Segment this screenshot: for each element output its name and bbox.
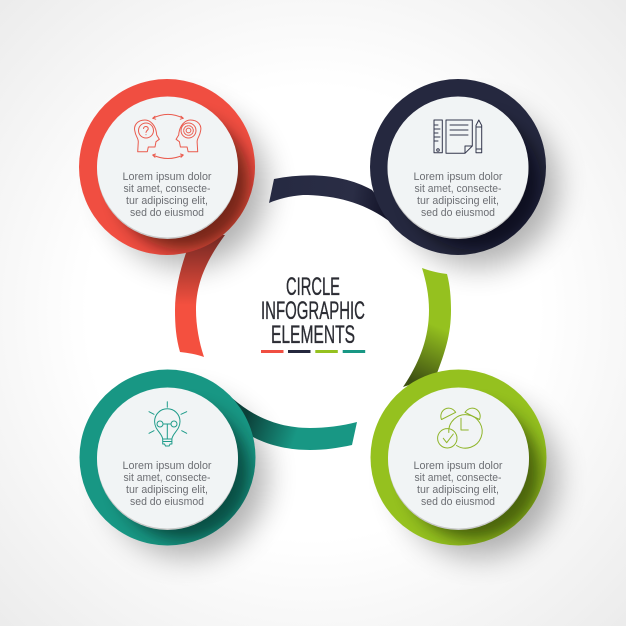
text: teal step: tur adipiscing elit, — [126, 484, 208, 496]
text: navy step: sed do eiusmod — [421, 207, 495, 219]
text: teal step: Lorem ipsum dolor — [122, 460, 212, 472]
icon: light bulb — [149, 402, 187, 446]
icon: alarm clock — [438, 408, 482, 448]
text: green step: Lorem ipsum dolor — [414, 460, 503, 472]
icon: two heads — [135, 114, 201, 158]
text: green step — [414, 460, 503, 508]
text: green step: sed do eiusmod — [421, 496, 495, 508]
ribbon: green — [403, 268, 451, 387]
text: red step: sit amet, consecte- — [124, 183, 211, 195]
icon: ruler, paper and pencil — [434, 120, 482, 153]
text: red step: sed do eiusmod — [130, 207, 204, 219]
text: navy step: Lorem ipsum dolor — [414, 171, 503, 183]
title — [261, 273, 365, 349]
text: teal step — [122, 460, 212, 508]
text: teal step: sed do eiusmod — [130, 496, 204, 508]
colour legend bars — [261, 350, 365, 353]
text: navy step: sit amet, consecte- — [414, 183, 502, 195]
text: red step: tur adipiscing elit, — [126, 195, 208, 207]
step: navy circle — [370, 79, 546, 255]
title: CIRCLE — [286, 273, 340, 301]
text: red step — [122, 171, 212, 219]
title: INFOGRAPHIC — [261, 297, 365, 325]
step: teal circle — [80, 370, 256, 546]
step: red circle — [79, 79, 255, 255]
ribbon: red — [175, 235, 225, 357]
text: green step: sit amet, consecte- — [414, 472, 502, 484]
text: teal step: sit amet, consecte- — [124, 472, 211, 484]
step: green circle — [370, 370, 546, 546]
text: green step: tur adipiscing elit, — [417, 484, 499, 496]
ribbon: navy — [269, 175, 410, 240]
text: red step: Lorem ipsum dolor — [122, 171, 212, 183]
text: navy step — [414, 171, 503, 219]
soft drop shadows — [107, 107, 558, 557]
text: navy step: tur adipiscing elit, — [417, 195, 499, 207]
title: ELEMENTS — [271, 321, 355, 349]
ribbon: teal — [232, 398, 357, 450]
